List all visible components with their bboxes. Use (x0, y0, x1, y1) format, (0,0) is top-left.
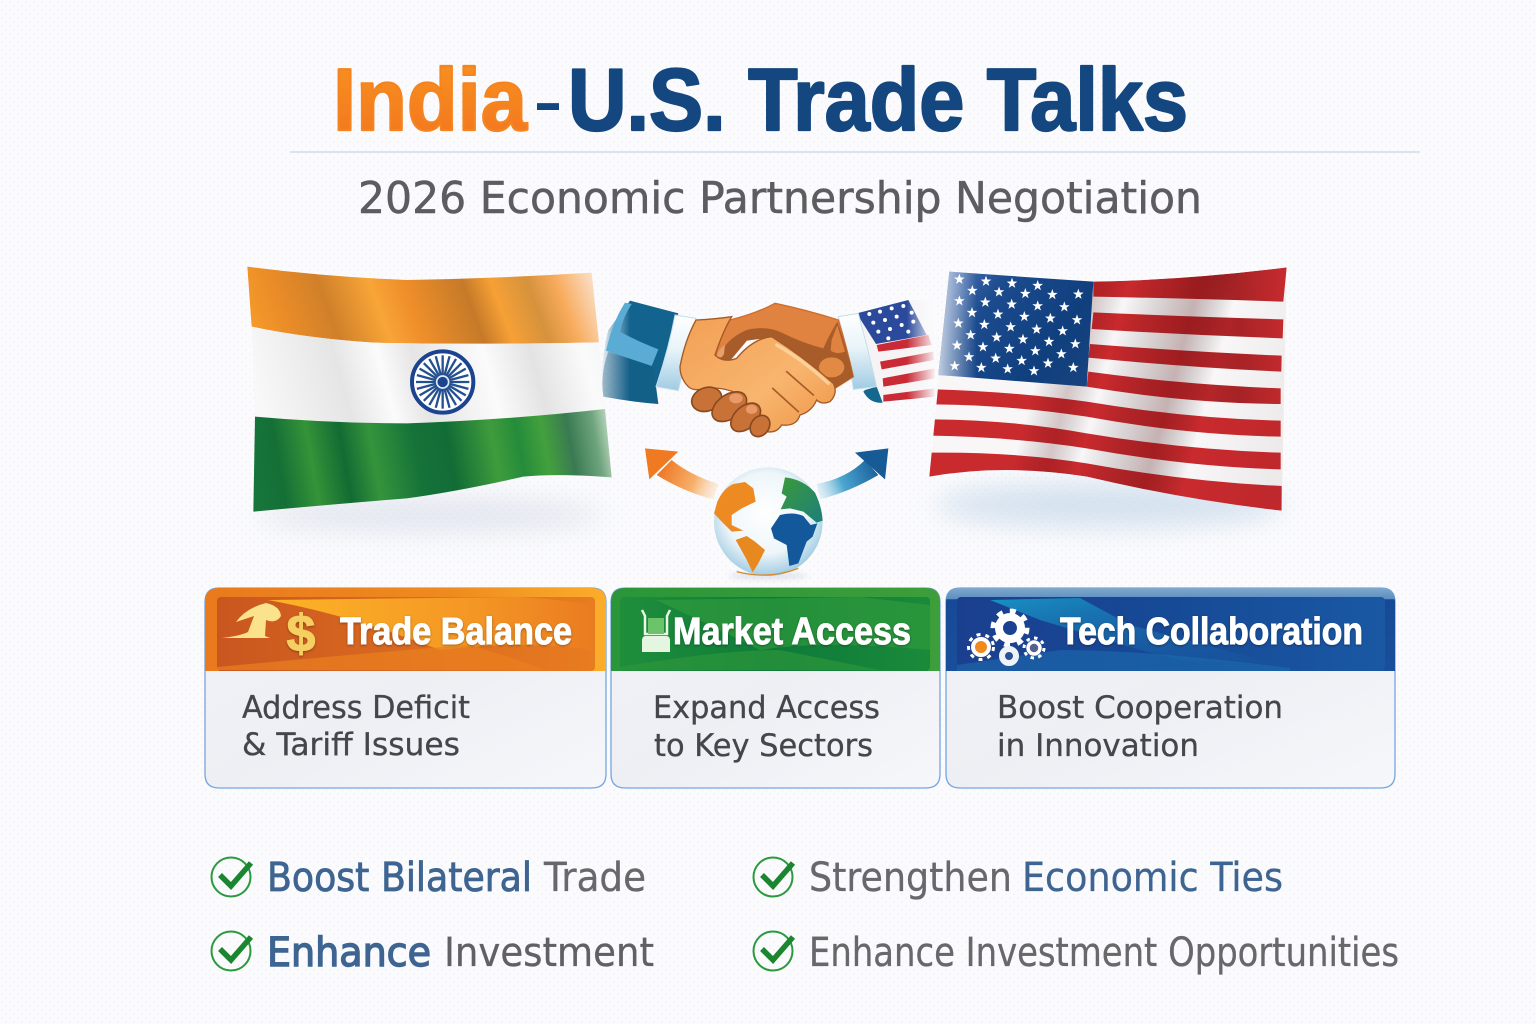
right sleeve with US flag (857, 298, 937, 403)
text block: Expand Access (653, 690, 880, 726)
USA flag (929, 268, 1286, 511)
benefit: Enhance Investment: Investment (444, 930, 654, 976)
benefit: Enhance Investment (212, 930, 654, 976)
India flag (247, 267, 612, 512)
text block: in Innovation (997, 728, 1199, 764)
text block: & Tariff Issues (242, 727, 460, 763)
arrow: orange (645, 448, 718, 499)
title: India (333, 50, 528, 149)
heading: Market Access (673, 611, 911, 653)
benefit: Strengthen Economic Ties (754, 855, 1283, 901)
fingers (688, 383, 774, 440)
panel: Market Access (611, 588, 940, 788)
Ashoka Chakra (412, 351, 473, 413)
benefit: Enhance Investment: Enhance (267, 930, 431, 976)
left hand (680, 317, 835, 432)
icon: gears (968, 611, 1044, 663)
shadow under flags (255, 483, 1285, 531)
benefit: Enhance Investment Opportunities: Enhance Investment Opportunities (809, 930, 1399, 976)
icon: market stall (642, 610, 670, 652)
left sleeve (602, 301, 678, 404)
text block (997, 690, 1283, 764)
text block (653, 690, 880, 764)
text block: to Key Sectors (654, 728, 873, 764)
left cuff (656, 315, 696, 391)
title: - (533, 50, 563, 149)
right cuff (838, 313, 877, 389)
benefit: Boost Bilateral Trade: Boost Bilateral (267, 855, 532, 901)
globe (714, 467, 823, 579)
subtitle: 2026 Economic Partnership Negotiation (358, 173, 1202, 224)
canton with stars (938, 272, 1093, 387)
benefit: Strengthen Economic Ties: Economic Ties (1022, 855, 1283, 901)
title: U.S. Trade Talks (568, 50, 1188, 149)
icon: dollar sign: $ (287, 605, 316, 663)
panel: Trade Balance (205, 588, 606, 788)
handshake (602, 298, 937, 440)
arrows from globe (645, 448, 888, 499)
icon: handshake mark (222, 603, 281, 638)
text block: Boost Cooperation (997, 690, 1283, 726)
text block: Address Deficit (242, 690, 470, 726)
title (333, 50, 1188, 149)
text block (242, 690, 470, 763)
right hand (715, 303, 853, 388)
heading: Trade Balance (340, 611, 572, 653)
heading: Tech Collaboration (1060, 611, 1363, 653)
benefit: Boost Bilateral Trade: Trade (543, 855, 646, 901)
arrow: blue (817, 448, 888, 499)
benefit: Boost Bilateral Trade (212, 855, 646, 901)
panel: Tech Collaboration (946, 588, 1395, 788)
benefit: Strengthen Economic Ties: Strengthen (809, 855, 1012, 901)
